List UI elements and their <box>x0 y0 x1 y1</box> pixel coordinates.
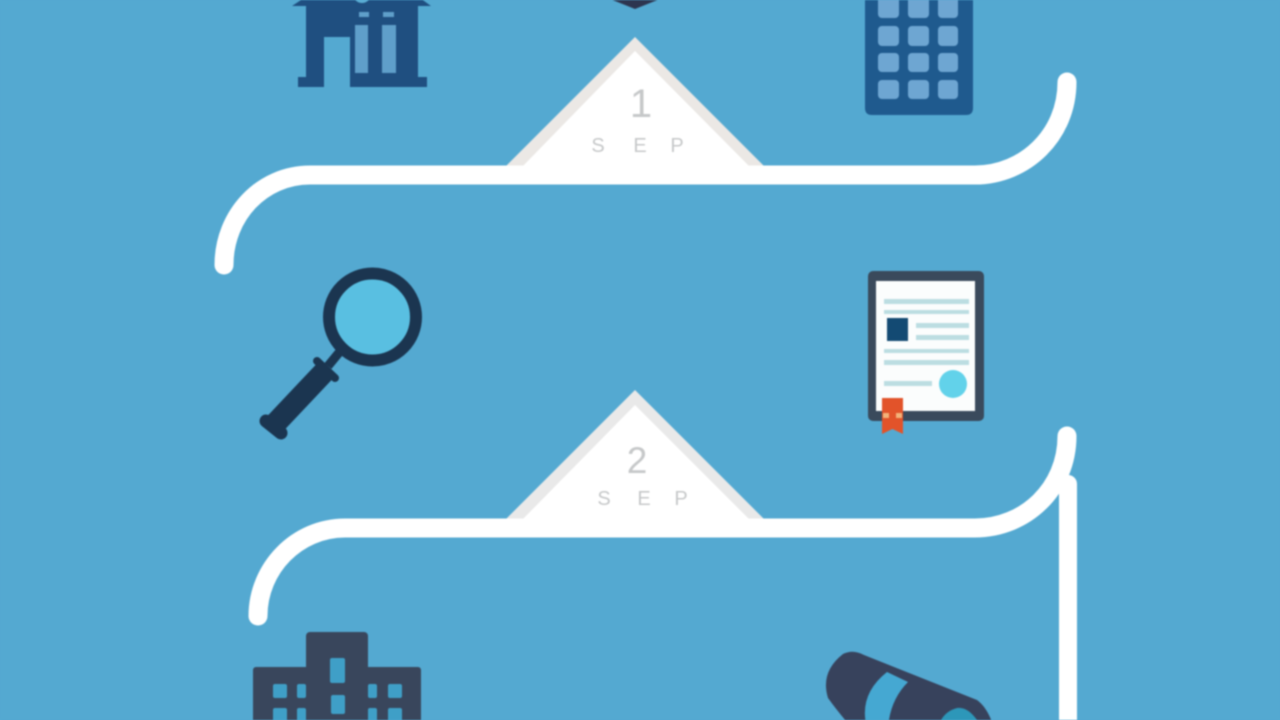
icon: city buildings <box>253 632 421 720</box>
timeline path 1 <box>224 82 1067 265</box>
icon: bank building <box>292 0 431 87</box>
ribbon seal <box>882 398 903 434</box>
timeline vertical connector <box>1059 484 1077 720</box>
date marker: 2 SEP <box>505 390 765 520</box>
date number 1: 1 <box>630 82 652 126</box>
date marker: 2 SEP: E <box>637 488 651 510</box>
date marker: 1 SEP: P <box>670 135 684 157</box>
month label 2: S <box>597 488 611 510</box>
icon: telescope <box>826 652 994 720</box>
date marker: 1 SEP <box>505 37 765 167</box>
timeline path 2 <box>258 436 1067 616</box>
date marker: 2 SEP: P <box>674 488 688 510</box>
date marker: 1 SEP: E <box>633 135 647 157</box>
icon: shield tip <box>610 0 660 9</box>
date number 2: 2 <box>627 440 647 481</box>
icon: tower block <box>865 0 973 115</box>
icon: certificate document <box>868 271 984 434</box>
month label 1: S <box>591 135 605 157</box>
icon: magnifying glass <box>266 274 416 433</box>
